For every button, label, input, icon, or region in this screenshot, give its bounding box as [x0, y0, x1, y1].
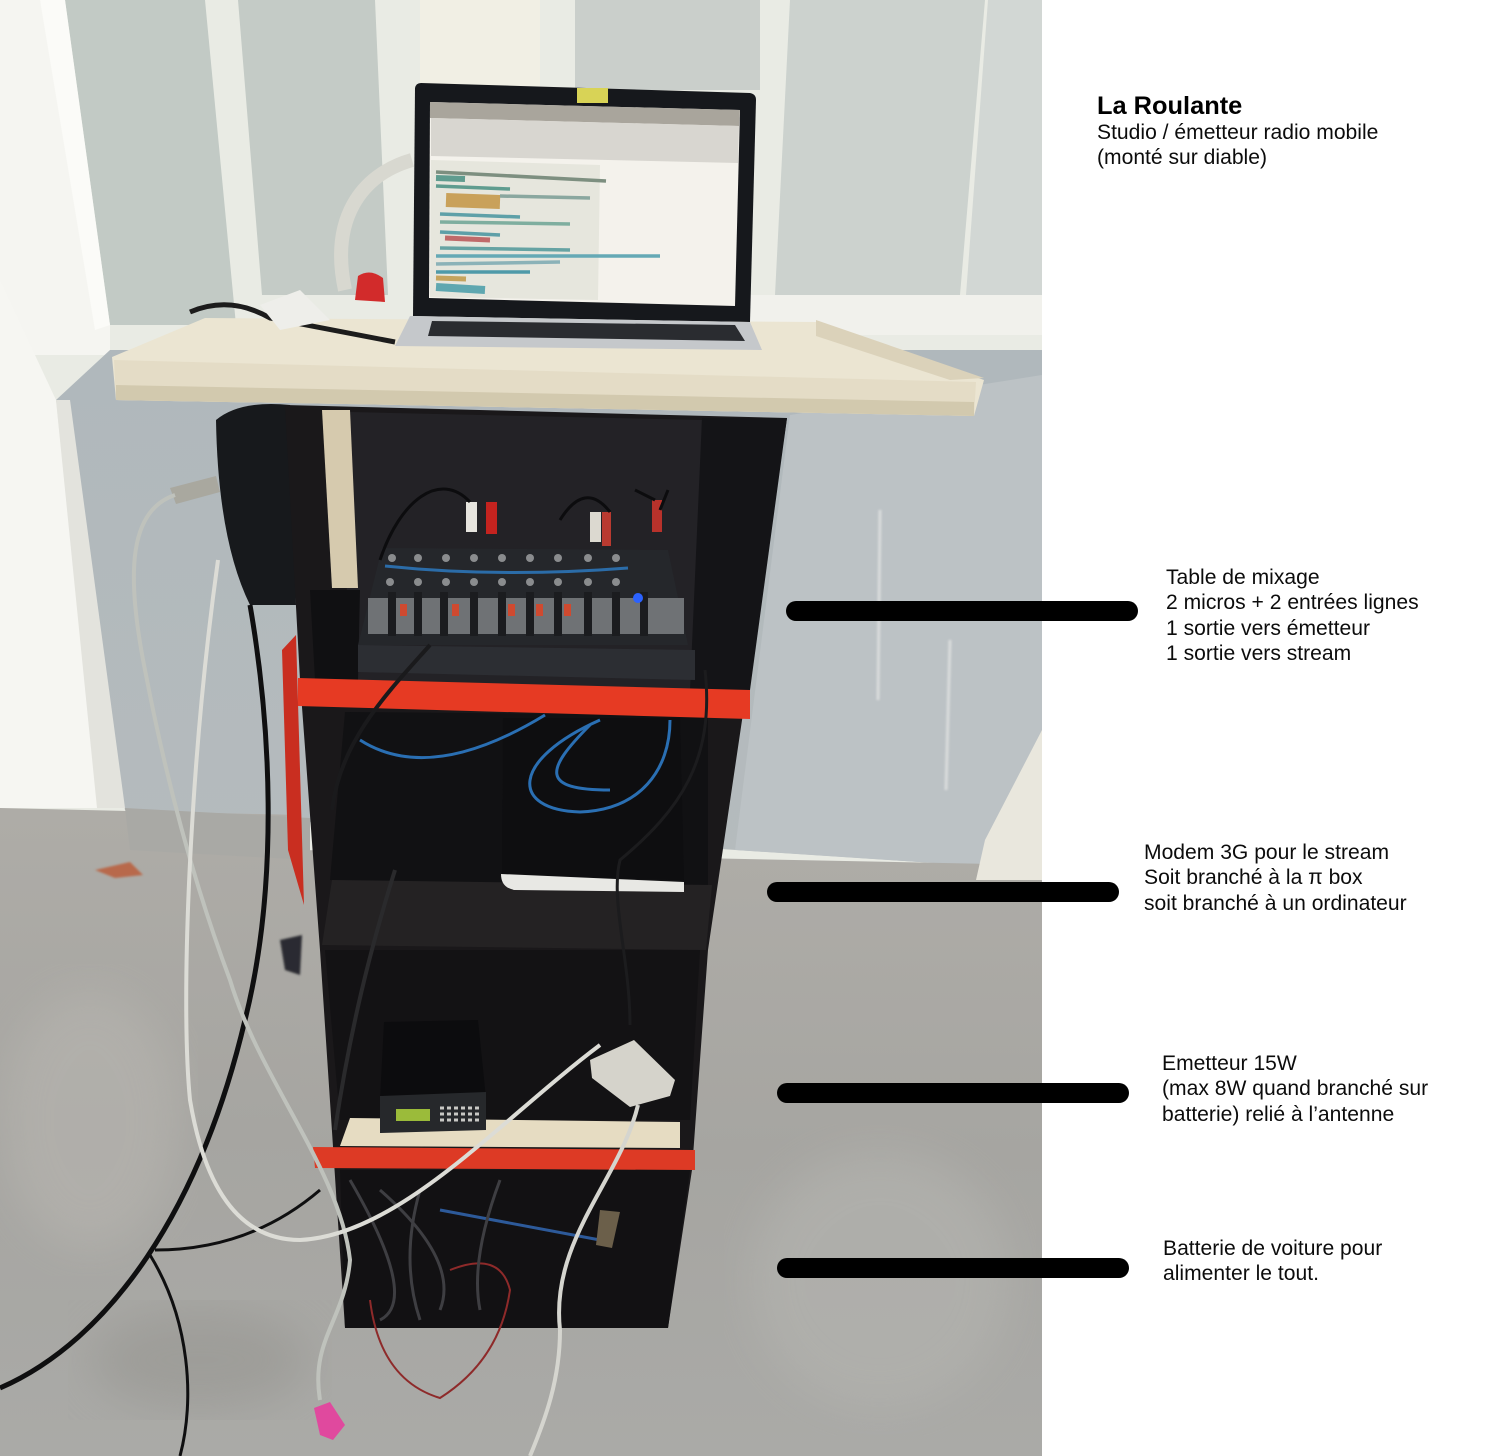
text: modem: Soit branché à la π box — [1144, 866, 1363, 889]
text: transmitter: (max 8W quand branché sur — [1162, 1077, 1428, 1100]
text: transmitter: Emetteur 15W — [1162, 1052, 1297, 1075]
pink connector — [314, 1402, 345, 1440]
background: wall, windows and floor — [0, 0, 1042, 1456]
photo: mobile radio studio on a hand truck — [0, 0, 1042, 1456]
red strap top — [298, 678, 750, 719]
grey and white cables — [134, 495, 638, 1456]
red strap bottom — [313, 1147, 695, 1170]
text: modem: soit branché à un ordinateur — [1144, 892, 1407, 915]
text: battery: alimenter le tout. — [1163, 1262, 1319, 1285]
battery wires — [350, 1180, 620, 1398]
text: transmitter: batterie) relié à l’antenne — [1162, 1103, 1394, 1126]
power plug — [170, 476, 220, 504]
text: modem: Modem 3G pour le stream — [1144, 841, 1389, 864]
red object — [355, 272, 385, 302]
callout bar: modem — [767, 882, 1119, 902]
callout bar: mixing desk — [786, 601, 1138, 621]
white shelf board — [340, 1118, 680, 1148]
cabinet body — [285, 405, 787, 1328]
title block: Studio / émetteur radio mobile — [1097, 121, 1378, 144]
power strip — [216, 404, 296, 605]
laptop — [395, 83, 762, 350]
callout bar: battery — [777, 1258, 1129, 1278]
power adapter — [590, 1040, 675, 1107]
text: mixing desk: 1 sortie vers stream — [1166, 642, 1351, 665]
text: mixing desk — [1166, 566, 1419, 665]
black cables — [0, 605, 707, 1456]
text: battery — [1163, 1237, 1382, 1285]
transmitter — [380, 1020, 486, 1133]
title block: (monté sur diable) — [1097, 146, 1267, 169]
mixing desk — [358, 548, 695, 680]
text: transmitter — [1162, 1052, 1428, 1126]
red strap side — [282, 635, 304, 905]
text: mixing desk: Table de mixage — [1166, 566, 1320, 589]
RCA connectors — [380, 489, 668, 560]
top board — [112, 290, 984, 416]
title block — [1097, 92, 1378, 169]
blue cables — [360, 715, 670, 812]
title block: La Roulante — [1097, 92, 1242, 120]
text: mixing desk: 2 micros + 2 entrées lignes — [1166, 591, 1419, 614]
text: mixing desk: 1 sortie vers émetteur — [1166, 617, 1370, 640]
modem — [501, 718, 684, 892]
callout bar: transmitter — [777, 1083, 1129, 1103]
cable hoop behind the laptop — [341, 160, 412, 290]
text: battery: Batterie de voiture pour — [1163, 1237, 1382, 1260]
text: modem — [1144, 841, 1407, 915]
